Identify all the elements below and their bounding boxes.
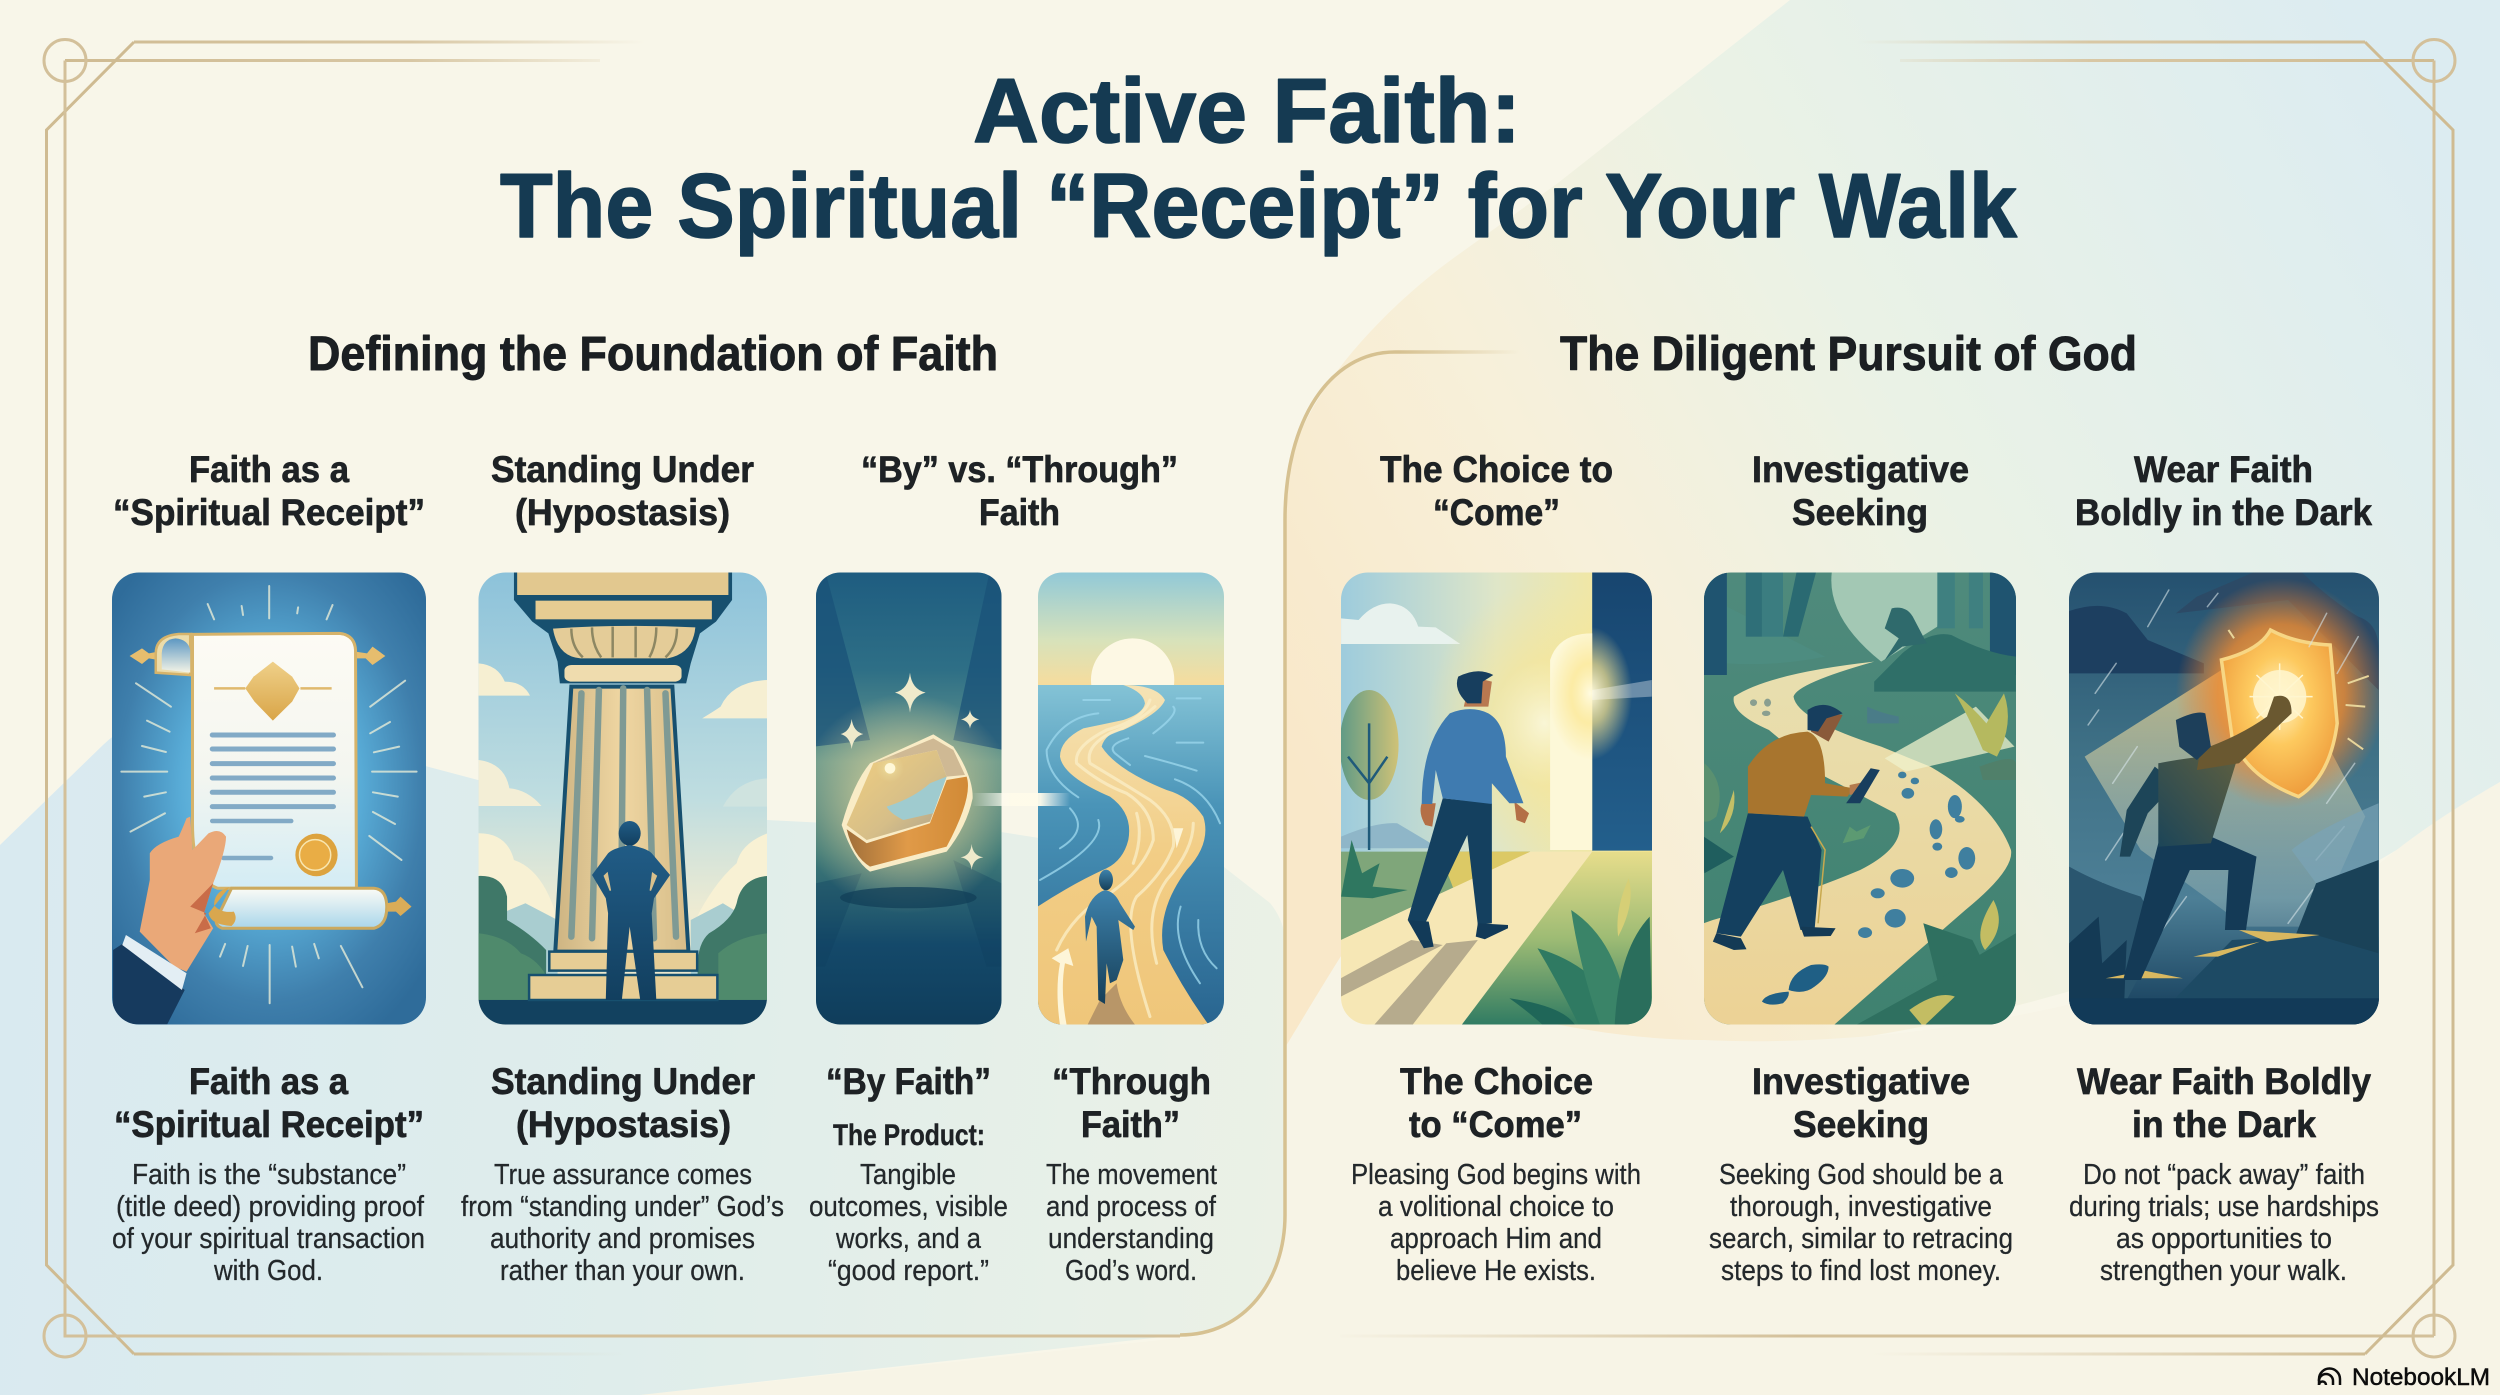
heading: defining the foundation: Defining the Foundation of Faith — [308, 328, 998, 381]
caption: by faith — [809, 1061, 1008, 1287]
section divider curve — [1180, 352, 1520, 1335]
panel: defining the foundation of faith — [108, 328, 1228, 1287]
illustration: man walking toward doorway — [1338, 570, 1664, 1027]
caption body: strengthen your walk. — [2100, 1255, 2347, 1287]
column heading: spiritual receipt: Faith as a — [189, 449, 349, 490]
column heading: choice to come — [1380, 449, 1613, 533]
column heading: investigative seeking — [1752, 449, 1969, 533]
column heading: wear faith boldly — [2075, 449, 2372, 533]
caption body: as opportunities to — [2116, 1223, 2332, 1255]
caption heading — [114, 1061, 424, 1145]
illustration: gem by faith — [816, 572, 1002, 1024]
caption heading: in the Dark — [2132, 1104, 2316, 1145]
column heading: choice to come: “Come” — [1433, 492, 1560, 533]
caption body: The movement — [1046, 1159, 1217, 1191]
column heading: by vs through: “By” vs. “Through” — [861, 449, 1178, 490]
caption body: works, and a — [835, 1223, 982, 1255]
illustration: scroll held by hand — [108, 570, 434, 1030]
column heading: standing under: (Hypostasis) — [515, 492, 730, 533]
caption body — [1351, 1159, 1641, 1287]
caption heading — [1400, 1061, 1593, 1145]
caption body: True assurance comes — [494, 1159, 752, 1191]
icon: NotebookLM logo — [2319, 1368, 2340, 1385]
caption: the choice to come — [1351, 1061, 1641, 1287]
caption body: steps to find lost money. — [1721, 1255, 2001, 1287]
caption body: understanding — [1048, 1223, 1214, 1255]
caption heading: “By Faith” — [826, 1061, 991, 1102]
caption body: Do not “pack away” faith — [2083, 1159, 2365, 1191]
caption body: a volitional choice to — [1378, 1191, 1614, 1223]
caption body: God’s word. — [1065, 1255, 1197, 1287]
caption body: Seeking God should be a — [1719, 1159, 2004, 1191]
caption heading — [1052, 1061, 1211, 1145]
caption: wear faith boldly — [2069, 1061, 2379, 1287]
column heading: choice to come: The Choice to — [1380, 449, 1613, 490]
caption body: from “standing under” God’s — [461, 1191, 784, 1223]
caption body: Pleasing God begins with — [1351, 1159, 1641, 1191]
caption body — [112, 1159, 425, 1287]
caption heading: (Hypostasis) — [516, 1104, 731, 1145]
title — [500, 61, 2017, 257]
caption heading: “Through — [1052, 1061, 1211, 1102]
caption: standing under — [461, 1061, 784, 1287]
column heading: standing under — [491, 449, 754, 533]
light beam connecting gem to path — [972, 793, 1070, 806]
caption body — [461, 1159, 784, 1287]
caption heading — [1752, 1061, 1970, 1145]
caption body: Tangible — [860, 1159, 956, 1191]
caption heading: Wear Faith Boldly — [2077, 1061, 2371, 1102]
title: The Spiritual “Receipt” for Your Walk — [500, 156, 2017, 257]
caption body: with God. — [213, 1255, 323, 1287]
title: Active Faith: — [973, 61, 1521, 162]
caption body: during trials; use hardships — [2069, 1191, 2379, 1223]
caption heading: Faith” — [1081, 1104, 1180, 1145]
caption heading: Faith as a — [189, 1061, 348, 1102]
caption body: and process of — [1046, 1191, 1217, 1223]
caption body: of your spiritual transaction — [112, 1223, 425, 1255]
caption body: search, similar to retracing — [1709, 1223, 2013, 1255]
caption heading: “Spiritual Receipt” — [114, 1104, 424, 1145]
column heading: investigative seeking: Investigative — [1752, 449, 1969, 490]
caption heading: Investigative — [1752, 1061, 1970, 1102]
column heading: by vs through — [861, 449, 1178, 533]
caption body: believe He exists. — [1396, 1255, 1596, 1287]
panel: the diligent pursuit of god — [1338, 328, 2386, 1287]
caption heading — [2077, 1061, 2371, 1145]
caption body — [2069, 1159, 2379, 1287]
caption body: authority and promises — [490, 1223, 755, 1255]
caption body: approach Him and — [1390, 1223, 1602, 1255]
column heading: investigative seeking: Seeking — [1792, 492, 1928, 533]
caption subheading: The Product: — [833, 1119, 985, 1152]
caption body: thorough, investigative — [1730, 1191, 1992, 1223]
caption body: outcomes, visible — [809, 1191, 1008, 1223]
heading: diligent pursuit: The Diligent Pursuit of God — [1560, 328, 2137, 381]
column heading: wear faith boldly: Wear Faith — [2134, 449, 2313, 490]
illustration: man seeking with flashlight — [1699, 570, 2022, 1027]
caption heading: to “Come” — [1409, 1104, 1582, 1145]
illustration: man under pillar — [475, 570, 773, 1027]
caption heading: The Choice — [1400, 1061, 1593, 1102]
column heading: by vs through: Faith — [979, 492, 1060, 533]
column heading: wear faith boldly: Boldly in the Dark — [2075, 492, 2372, 533]
caption: through faith — [1046, 1061, 1217, 1287]
caption body — [1709, 1159, 2013, 1287]
caption heading — [491, 1061, 755, 1145]
caption body: rather than your own. — [500, 1255, 745, 1287]
column heading: spiritual receipt — [113, 449, 425, 533]
column heading: standing under: Standing Under — [491, 449, 754, 490]
caption body: Faith is the “substance” — [132, 1159, 406, 1191]
caption body: “good report.” — [828, 1255, 989, 1287]
caption body — [1046, 1159, 1217, 1287]
caption body — [809, 1159, 1008, 1287]
illustration: man raising shield in storm — [2064, 570, 2386, 1028]
illustration: winding path through faith — [1035, 570, 1228, 1028]
caption: spiritual receipt — [112, 1061, 425, 1287]
caption: investigative seeking — [1709, 1061, 2013, 1287]
caption body: (title deed) providing proof — [116, 1191, 425, 1223]
column heading: spiritual receipt: “Spiritual Receipt” — [113, 492, 425, 533]
NotebookLM watermark: NotebookLM — [2352, 1364, 2490, 1391]
caption heading: Seeking — [1793, 1104, 1929, 1145]
caption heading: Standing Under — [491, 1061, 755, 1102]
